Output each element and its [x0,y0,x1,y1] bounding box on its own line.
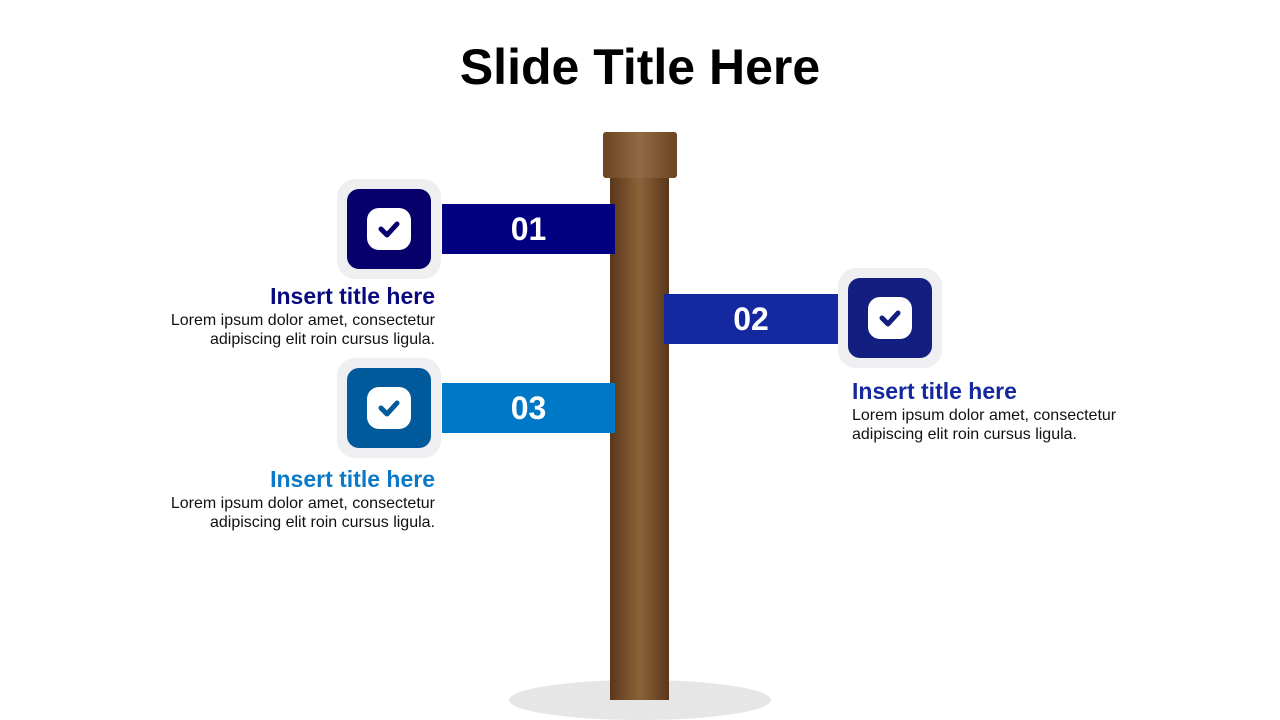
text 02: Lorem ipsum dolor amet, consectetur [852,407,1116,424]
text 02: Insert title here [852,378,1017,404]
icon 02 [838,268,942,368]
bar 02 [664,294,838,344]
text 03: adipiscing elit roin cursus ligula. [210,514,435,531]
text 02 [852,378,1116,443]
pole shaft [610,172,669,700]
text 01: Lorem ipsum dolor amet, consectetur [171,312,435,329]
text 03 [171,466,435,531]
text 01 [171,283,435,348]
pole [603,132,677,700]
icon 01 [337,179,441,279]
bar 01: 01 [511,210,546,246]
text 03: Insert title here [270,466,435,492]
icon 03 [337,358,441,458]
pole shadow [509,680,771,720]
bar 02: 02 [733,300,769,336]
text 01: Insert title here [270,283,435,309]
text 03: Lorem ipsum dolor amet, consectetur [171,495,435,512]
pole cap [603,132,677,178]
bar 03 [442,383,615,433]
bar 01 [442,204,615,254]
title: Slide Title Here [460,39,820,95]
bar 03: 03 [511,390,546,426]
text 01: adipiscing elit roin cursus ligula. [210,331,435,348]
text 02: adipiscing elit roin cursus ligula. [852,426,1077,443]
